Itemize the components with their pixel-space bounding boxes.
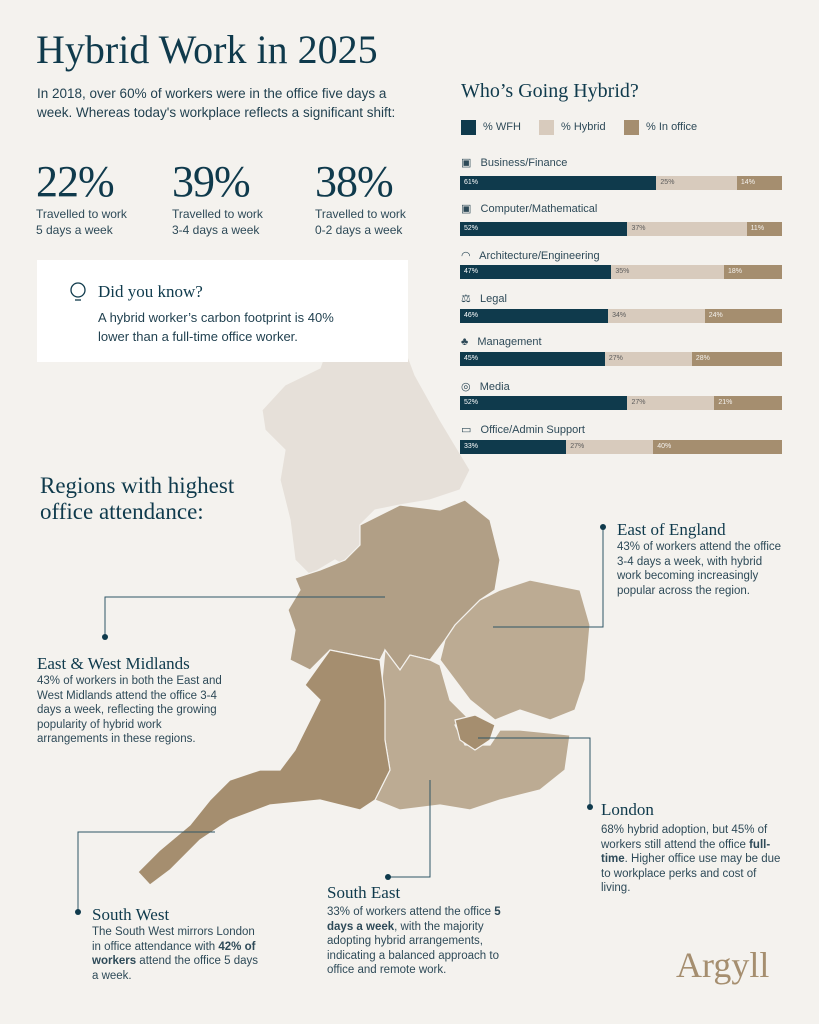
bar chart: ♣ Management — [461, 336, 542, 348]
bar chart: 25% — [660, 179, 674, 186]
title: Hybrid Work in 2025 — [36, 27, 378, 72]
box text: A hybrid worker’s carbon footprint is 40% — [98, 310, 334, 325]
stat 39% — [172, 157, 263, 237]
callout: South East: 33% of workers attend the office 5 days a week, with the majority adopting hybrid arrangements, indicating a balanced approach to office and remote work. — [327, 906, 501, 976]
bar chart: 11% — [751, 225, 764, 232]
bar chart: 18% — [728, 268, 742, 275]
regions heading: office attendance: — [40, 499, 204, 524]
callout: London: 68% hybrid adoption, but 45% of workers still attend the office full-time. Higher office use may be due to workplace perks and cost of living. — [601, 824, 780, 894]
did you know box — [37, 260, 408, 362]
regions heading — [40, 473, 234, 524]
bar chart: 52% — [464, 399, 478, 406]
bar chart: 40% — [657, 443, 671, 450]
bar chart: 46% — [464, 312, 478, 319]
regions heading: Regions with highest — [40, 473, 234, 498]
legend: % Hybrid — [561, 121, 606, 133]
bar chart: 34% — [612, 312, 626, 319]
stat 38%: Travelled to work — [315, 207, 406, 221]
stat 38%: 38% — [315, 157, 393, 206]
bar chart: ◠ Architecture/Engineering — [461, 250, 600, 262]
stat 22%: 22% — [36, 157, 114, 206]
bar chart: ▭ Office/Admin Support — [461, 424, 585, 436]
bar chart: ▣ Computer/Mathematical — [461, 203, 597, 215]
bar chart: 21% — [718, 399, 732, 406]
callout: South East: South East — [327, 883, 400, 902]
stat 22%: 5 days a week — [36, 223, 113, 237]
stat 39%: Travelled to work — [172, 207, 263, 221]
bar chart — [460, 157, 782, 454]
bar chart: 45% — [464, 355, 478, 362]
bar chart: 24% — [709, 312, 723, 319]
stat 38%: 0-2 days a week — [315, 223, 402, 237]
bar chart: ◎ Media — [461, 381, 510, 393]
logo: Argyll — [676, 945, 769, 985]
bar chart: 27% — [609, 355, 623, 362]
callout: East of England: East of England — [617, 520, 726, 539]
bar chart: ▣ Business/Finance — [461, 157, 567, 169]
legend: % In office — [646, 121, 697, 133]
bar chart: 52% — [464, 225, 478, 232]
callout: London: London — [601, 800, 654, 819]
box text — [98, 310, 334, 344]
bar chart: 47% — [464, 268, 478, 275]
legend — [461, 120, 697, 135]
bar chart: 28% — [696, 355, 710, 362]
bar chart: 33% — [464, 443, 478, 450]
box text: lower than a full-time office worker. — [98, 329, 298, 344]
bar chart: 27% — [631, 399, 645, 406]
callout: East & West Midlands: East & West Midlands — [37, 654, 190, 673]
chart title: Who’s Going Hybrid? — [461, 80, 639, 102]
bar chart: 37% — [631, 225, 645, 232]
bar chart: 61% — [464, 179, 478, 186]
legend: % WFH — [483, 121, 521, 133]
stat 22%: Travelled to work — [36, 207, 127, 221]
bar chart: 35% — [615, 268, 629, 275]
bar chart: 27% — [570, 443, 584, 450]
callout: South West: South West — [92, 905, 169, 924]
stat 38% — [315, 157, 406, 237]
callout: East & West Midlands: 43% of workers in both the East and West Midlands attend the office 3-4 days a week, reflecting the growing popularity of hybrid work arrangements in these regions. — [37, 675, 222, 745]
stat 22% — [36, 157, 127, 237]
callout: South West: The South West mirrors London in office attendance with 42% of workers attend the office 5 days a week. — [92, 926, 258, 982]
stat 39%: 39% — [172, 157, 250, 206]
bar chart: ⚖ Legal — [461, 293, 507, 305]
icon: lightbulb — [70, 282, 86, 301]
intro text: In 2018, over 60% of workers were in the office five days a week. Whereas today's workplace reflects a significant shift: — [37, 86, 395, 120]
bar chart: 14% — [741, 179, 755, 186]
callout: East of England: 43% of workers attend the office 3-4 days a week, with hybrid work becoming increasingly popular across the region. — [617, 541, 781, 596]
box heading: Did you know? — [98, 282, 203, 301]
stat 39%: 3-4 days a week — [172, 223, 259, 237]
